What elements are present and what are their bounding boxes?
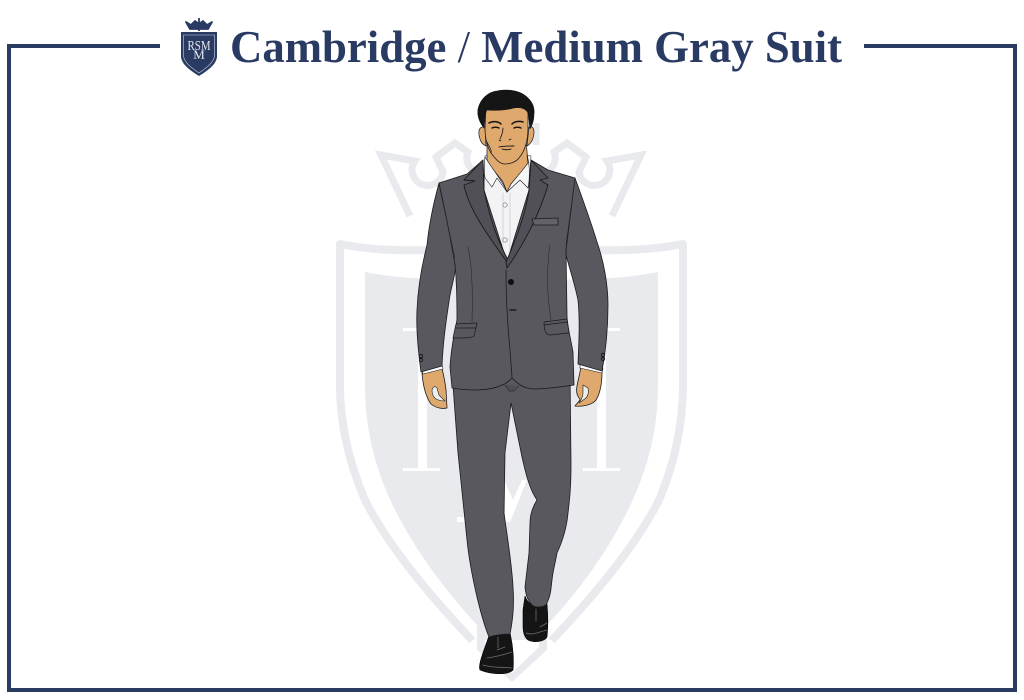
left shirt collar — [484, 157, 507, 192]
face — [485, 105, 528, 164]
jacket seams and darts — [439, 178, 575, 322]
right lapel — [506, 160, 548, 268]
watermark monogram right stem — [583, 328, 620, 471]
watermark shield fill — [365, 272, 658, 682]
shirt placket and buttons — [503, 193, 510, 250]
right shoe body — [523, 596, 548, 642]
title: Cambridge / Medium Gray Suit — [230, 21, 843, 72]
left cuff — [421, 364, 443, 374]
left sleeve buttons — [419, 354, 423, 362]
watermark: shield and crown — [340, 123, 683, 682]
logo crown — [186, 18, 212, 31]
logo shield inner line — [184, 35, 214, 73]
left shoe body — [479, 633, 513, 674]
logo: crest — [181, 18, 217, 76]
neck and collar skin — [487, 140, 528, 192]
right shirt collar — [507, 155, 529, 192]
left shoe — [479, 633, 513, 674]
watermark monogram centre — [457, 480, 527, 522]
right hand — [575, 366, 602, 406]
jacket body — [439, 160, 575, 390]
left hand — [422, 369, 447, 408]
logo monogram M: M — [193, 47, 205, 62]
right shoe details — [526, 609, 547, 634]
right sleeve — [566, 178, 608, 371]
watermark shield outline — [340, 244, 683, 641]
left hand finger gap — [432, 387, 445, 401]
man in medium gray suit — [417, 90, 608, 674]
left sleeve — [417, 183, 456, 372]
trousers — [452, 372, 571, 637]
left shoe details — [483, 637, 512, 668]
shirt — [484, 156, 531, 262]
left lapel — [464, 160, 507, 262]
right sleeve buttons — [601, 353, 605, 361]
logo shield — [181, 32, 217, 76]
watermark crown — [381, 123, 641, 216]
hair — [478, 90, 534, 129]
vent under jacket — [505, 385, 519, 391]
right flap pocket — [544, 319, 569, 335]
watermark chevron inner cutout — [485, 640, 539, 673]
left flap pocket — [453, 323, 477, 338]
right shoe — [523, 596, 548, 642]
ears — [479, 127, 534, 146]
right cuff — [580, 363, 603, 373]
logo monogram RSM: RSM — [188, 39, 211, 54]
watermark monogram left stem — [403, 328, 440, 471]
buttonhole — [510, 309, 516, 311]
chest pocket — [532, 218, 558, 225]
jacket front edge — [506, 270, 512, 378]
jacket button — [508, 279, 514, 285]
facial features — [487, 121, 523, 153]
right hand finger gap — [579, 385, 588, 403]
